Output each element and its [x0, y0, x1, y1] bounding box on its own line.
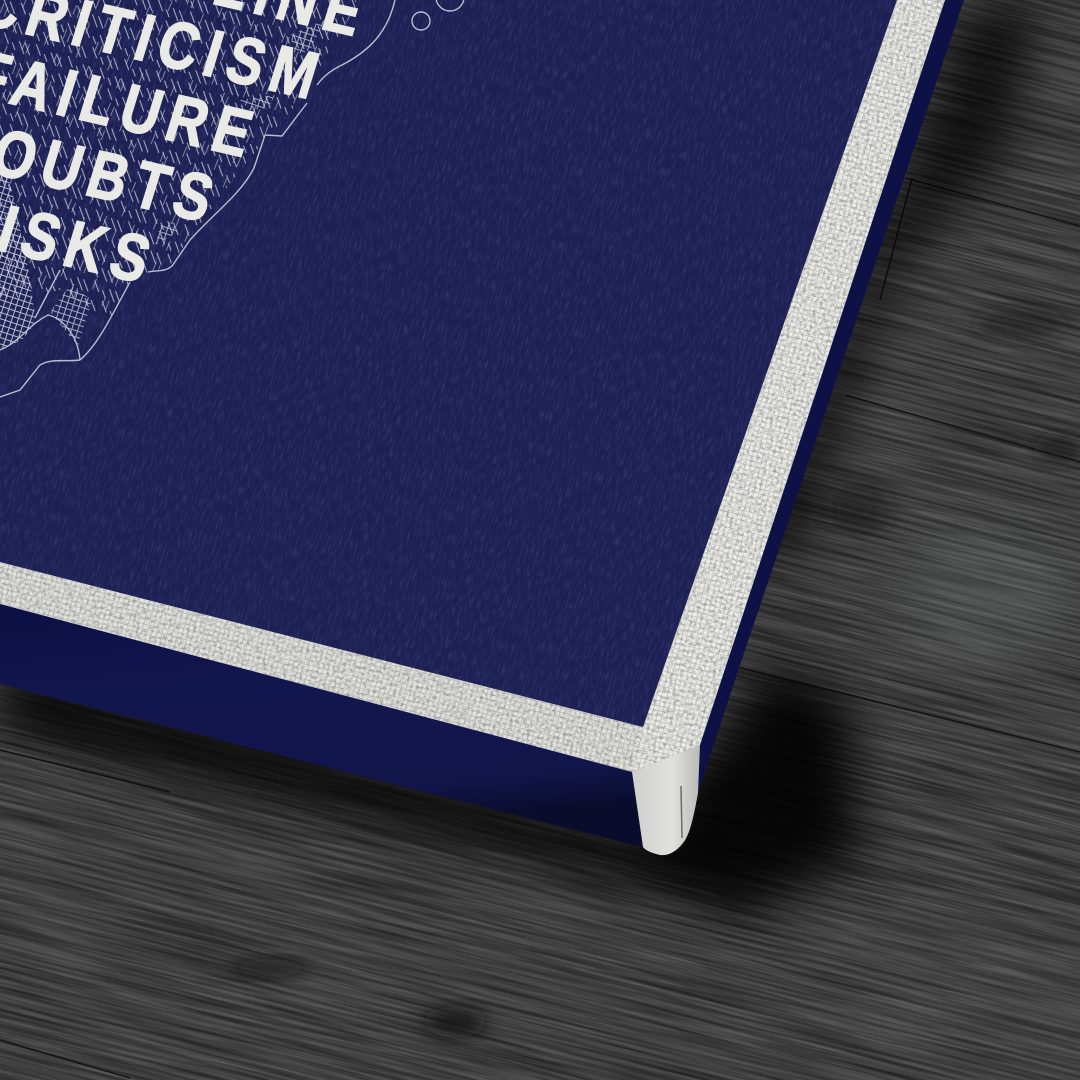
floor light patches — [900, 530, 1080, 650]
hatching: iceberg shading — [0, 0, 360, 350]
canvas: navy front face — [0, 0, 897, 727]
canvas: folded white corner — [632, 745, 700, 855]
iceberg illustration — [0, 0, 464, 397]
iceberg outline — [0, 0, 395, 397]
canvas: navy right side — [690, 0, 964, 793]
canvas: white bottom border — [0, 562, 700, 772]
wood knots — [1038, 436, 1080, 464]
canvas: white right border — [632, 0, 945, 772]
canvas: navy bottom side — [0, 600, 646, 848]
iceberg words — [0, 0, 380, 299]
bubbles — [412, 0, 464, 30]
